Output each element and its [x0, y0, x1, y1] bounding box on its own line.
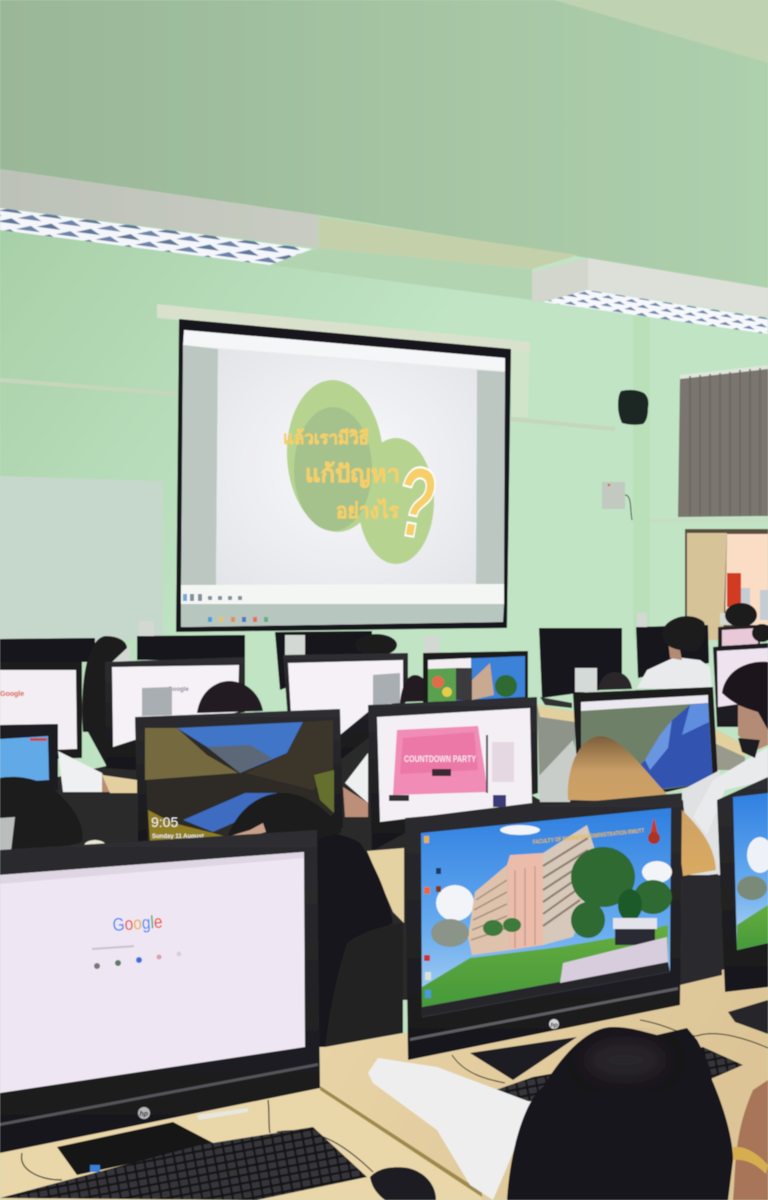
- right front monitor: [717, 777, 768, 992]
- chair right: [680, 874, 722, 985]
- keyboard front left: [0, 1127, 367, 1200]
- white shirt left student: [58, 751, 137, 793]
- countdown banner text: COUNTDOWN PARTY: [404, 754, 476, 764]
- wall switch box: [602, 482, 632, 520]
- chair left: [68, 793, 138, 846]
- google logo: Google: [112, 912, 163, 935]
- back row paper notes: [109, 613, 730, 662]
- head behind monitor B: [400, 675, 436, 702]
- monitor small blue left: [0, 724, 58, 792]
- speaker: [618, 390, 648, 425]
- ceiling light right: [532, 258, 768, 334]
- white sleeve foreground: [368, 1058, 533, 1200]
- back students heads: [82, 603, 757, 765]
- small far monitor: [718, 624, 768, 647]
- student with mask right: [693, 662, 768, 835]
- front left monitor: [0, 830, 320, 1153]
- caption panel wallpaper: [560, 937, 668, 983]
- monitor A row two: Google: [168, 687, 189, 693]
- HP logo: hp: [550, 1023, 558, 1029]
- stand middle: [470, 1037, 577, 1080]
- monitor B row two: [283, 653, 408, 760]
- tan desk next to student in black: [367, 848, 404, 923]
- crest: [648, 817, 660, 844]
- whiteboard: [0, 476, 163, 640]
- desk top surface: [320, 962, 768, 1200]
- lock screen clock: 9:05: [151, 814, 178, 830]
- chair middle: [325, 923, 403, 1047]
- map monitor: [573, 687, 718, 792]
- monitor far left row two: [0, 662, 82, 760]
- colorful monitor row two: [423, 651, 528, 703]
- wallpaper heading: FACULTY OF BUSINESS ADMINISTRATION RMUTT: [533, 828, 645, 846]
- projector screen bracket: [510, 340, 530, 417]
- stand front left: [57, 1122, 217, 1175]
- wallpaper clouds: [436, 825, 672, 921]
- wallpaper building: [468, 825, 595, 955]
- projector screen housing: [157, 304, 530, 352]
- monitor A row two: [105, 657, 245, 770]
- projected title text: ?: [388, 444, 445, 561]
- cables on desk: [452, 1020, 768, 1083]
- grey shirt person: [538, 740, 578, 802]
- ceiling light left: [0, 169, 318, 265]
- lower desk: [0, 1084, 482, 1200]
- projected title text: แก้ปัญหา: [305, 461, 400, 488]
- foreground arm with watch: [733, 1080, 768, 1200]
- search hint and shortcuts: [92, 945, 182, 969]
- monitor right row two: [713, 643, 768, 727]
- monitor far left row two: Google: [0, 691, 24, 698]
- mouse: [370, 1167, 436, 1200]
- person behind map monitor: [598, 672, 632, 690]
- desktop icons: [424, 836, 441, 998]
- desk and wall gap row three: [537, 705, 745, 800]
- foreground student head: [507, 1027, 733, 1200]
- media player controls: [183, 594, 242, 601]
- HP logo: [549, 1019, 559, 1029]
- paper slip on desk: [197, 1108, 248, 1120]
- mountain wallpaper monitor: Sunday 11 August: [152, 834, 204, 840]
- back row monitors: [0, 625, 709, 708]
- student head bottom left: [0, 777, 106, 860]
- white shirt and arm middle student: [343, 753, 368, 817]
- projected green circles: [283, 378, 434, 564]
- mountain wallpaper monitor: [135, 709, 343, 846]
- group of students in wallpaper: [613, 918, 657, 945]
- blonde student hair: [568, 736, 716, 876]
- keyboard middle: [490, 1047, 743, 1102]
- paper note on black monitor: [575, 668, 597, 692]
- student with white shirt at back right: [637, 616, 712, 690]
- tree: [431, 847, 672, 947]
- cables left desk: [22, 1100, 373, 1180]
- HP logo: hp: [140, 1111, 149, 1118]
- projected title text: [283, 428, 445, 561]
- wall ledges: [0, 378, 768, 522]
- HP logo: [138, 1107, 150, 1119]
- head behind monitor A: [197, 681, 263, 713]
- right keyboard: [728, 1000, 768, 1034]
- student in black: [228, 793, 393, 1047]
- projected title text: แล้วเรามีวิธี: [283, 428, 369, 448]
- projector screen: [176, 319, 511, 632]
- window blind: [678, 365, 768, 517]
- dark underlay between rows: [0, 700, 768, 1000]
- monitor C countdown party: [368, 697, 538, 851]
- projected taskbar icons: [208, 617, 268, 622]
- projected title text: อย่างไร: [336, 498, 400, 523]
- front monitor with building wallpaper: [405, 793, 682, 1060]
- doorway: [685, 529, 768, 640]
- student white shirt behind blonde: [682, 770, 720, 875]
